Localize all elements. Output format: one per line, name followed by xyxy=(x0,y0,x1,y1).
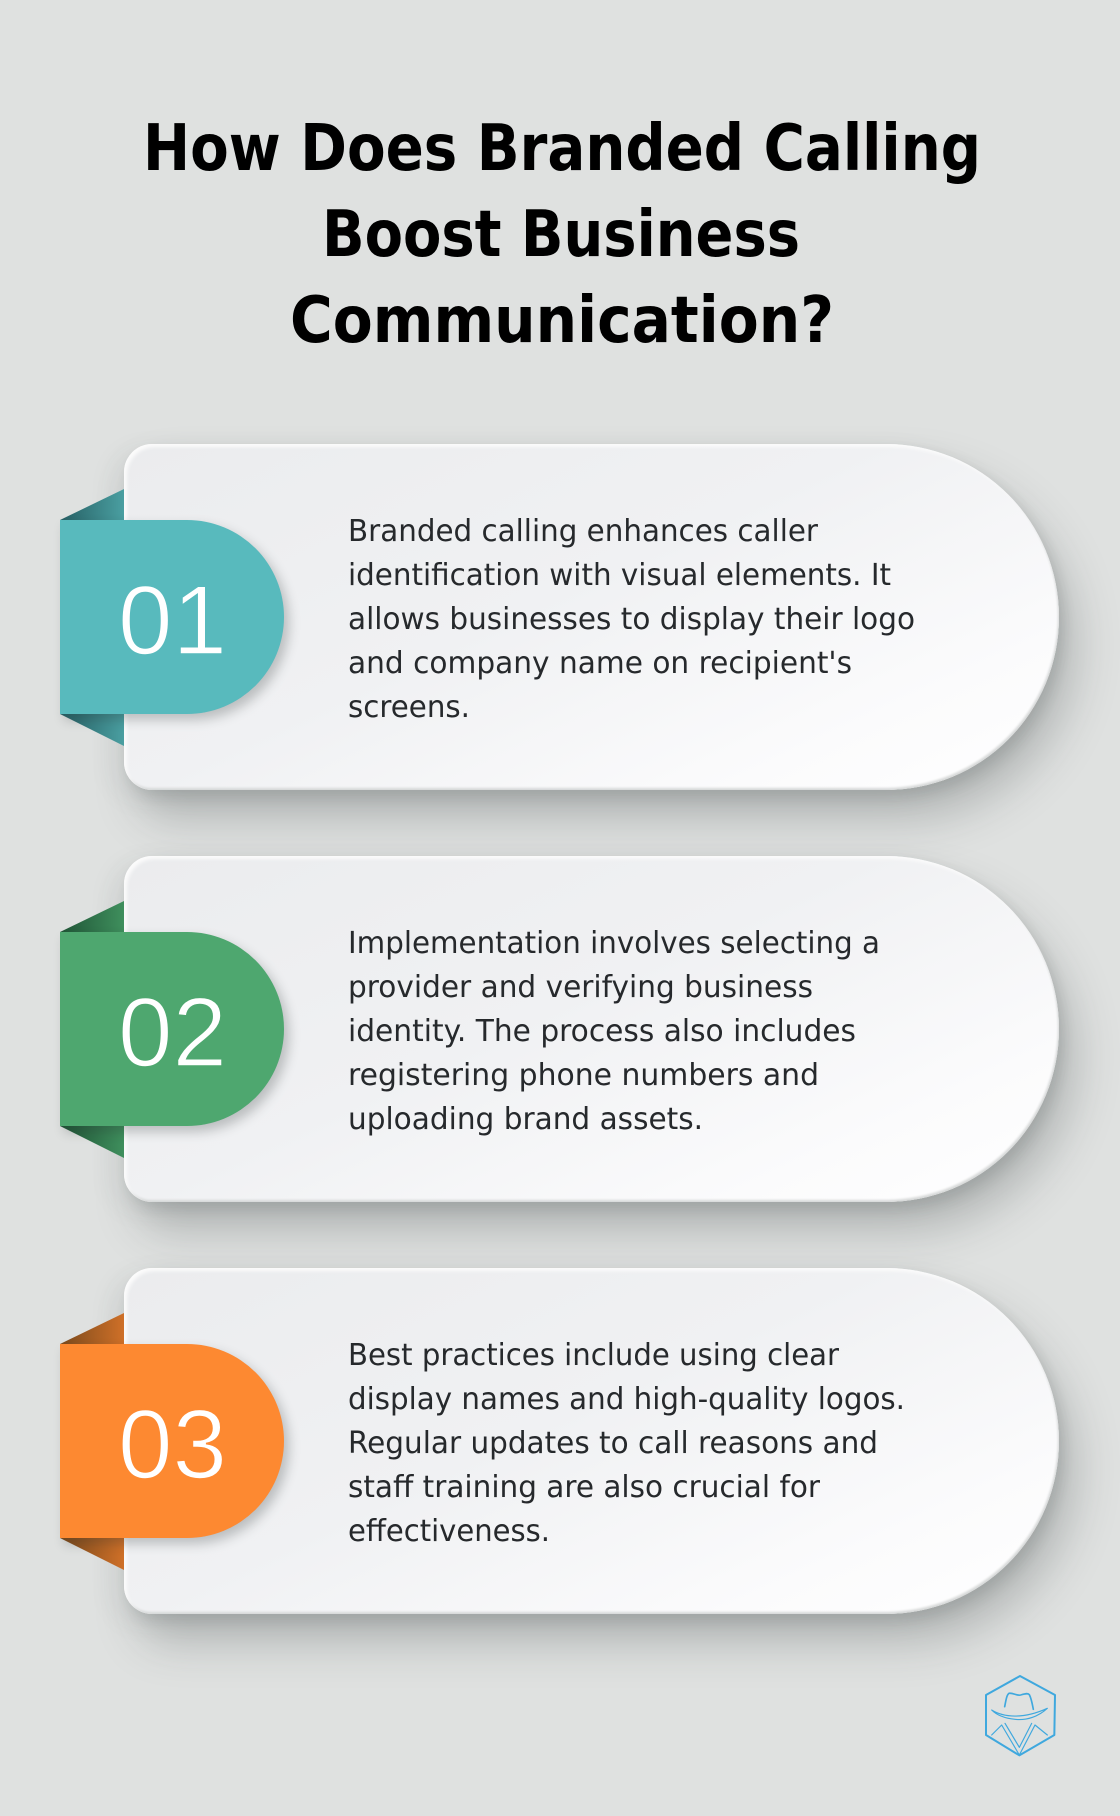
card: step 02 background xyxy=(124,856,1059,1202)
badge: step 01 xyxy=(60,520,284,714)
text: step 01 description: identification with visual elements. It xyxy=(348,558,891,593)
icon: hexagon spy logo xyxy=(985,1675,1056,1756)
text: step 03 description: staff training are also crucial for xyxy=(348,1470,821,1505)
text: step 02 description: provider and verifying business xyxy=(348,970,813,1005)
text: step 03 description xyxy=(348,1338,905,1549)
text: step 02 description: identity. The process also includes xyxy=(348,1014,856,1049)
number: 03: 03 xyxy=(118,1389,227,1499)
ribbon folds: step 03 xyxy=(60,1313,124,1570)
panel: step 03 xyxy=(60,1265,1094,1662)
number: 01: 01 xyxy=(118,565,227,675)
badge: step 02 xyxy=(60,932,284,1126)
title: Communication? xyxy=(290,284,834,358)
text: step 01 description: and company name on recipient's xyxy=(348,646,852,681)
text: step 03 description: Best practices include using clear xyxy=(348,1338,840,1373)
title: How Does Branded Calling xyxy=(143,112,981,186)
ribbon folds: step 01 xyxy=(60,489,124,746)
card: step 01 background xyxy=(124,444,1059,790)
text: step 03 description: Regular updates to call reasons and xyxy=(348,1426,878,1461)
text: step 02 description: uploading brand assets. xyxy=(348,1102,703,1137)
panel: step 01 xyxy=(60,441,1094,838)
number: 02: 02 xyxy=(118,977,227,1087)
text: step 01 description: allows businesses to display their logo xyxy=(348,602,915,637)
text: step 01 description: Branded calling enhances caller xyxy=(348,514,819,549)
text: step 02 description: registering phone numbers and xyxy=(348,1058,819,1093)
title: Boost Business xyxy=(322,198,800,272)
ribbon folds: step 02 xyxy=(60,901,124,1158)
card: step 03 background xyxy=(124,1268,1059,1614)
title xyxy=(143,112,981,358)
text: step 02 description: Implementation involves selecting a xyxy=(348,926,880,961)
panel: step 02 xyxy=(60,853,1094,1250)
text: step 01 description: screens. xyxy=(348,690,470,725)
text: step 03 description: effectiveness. xyxy=(348,1514,550,1549)
text: step 02 description xyxy=(348,926,880,1137)
badge: step 03 xyxy=(60,1344,284,1538)
text: step 01 description xyxy=(348,514,915,725)
text: step 03 description: display names and high-quality logos. xyxy=(348,1382,905,1417)
